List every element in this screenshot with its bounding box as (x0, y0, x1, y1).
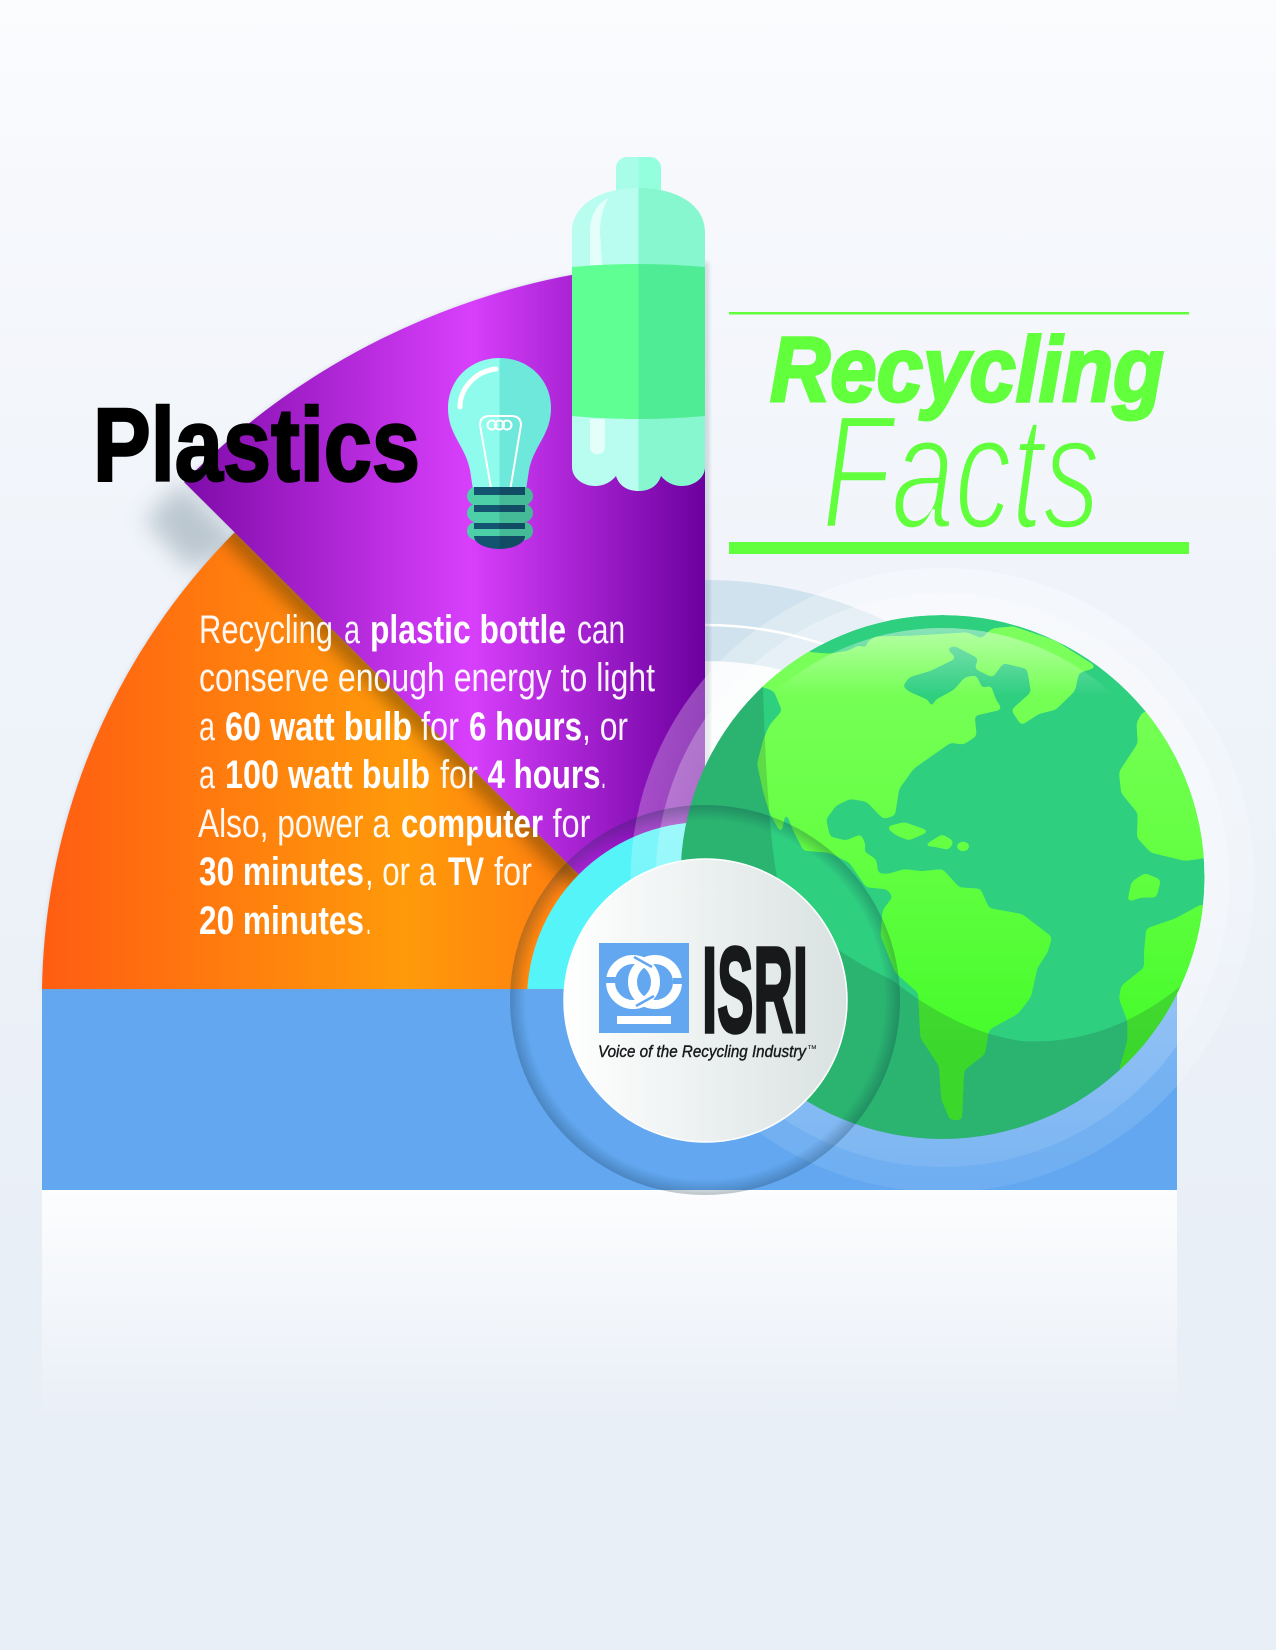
body text (198, 608, 655, 943)
globe lower shadow (681, 686, 1180, 1139)
body text: , or a (365, 850, 437, 894)
continents (758, 626, 1204, 1120)
body text: 100 watt bulb (225, 753, 430, 797)
bulb glass (448, 358, 551, 490)
body text: conserve enough energy to light (199, 656, 655, 700)
orange sector (40, 532, 579, 990)
body text: can (577, 608, 625, 652)
body text: Recycling (199, 608, 333, 652)
body text: . (366, 899, 371, 943)
body text: a (344, 608, 361, 652)
body text: . (601, 753, 606, 797)
body text: 30 minutes (199, 850, 364, 894)
pale concentric sectors behind globe (705, 580, 886, 708)
globe halo rings (630, 568, 1254, 1192)
ISRI logo (598, 922, 817, 1061)
plastic bottle icon (572, 157, 705, 491)
globe top gloss (781, 628, 1106, 689)
purple sector (184, 262, 710, 1000)
bulb filament (480, 416, 521, 488)
title: Recycling Facts: Facts (822, 380, 1100, 563)
logo tagline: Voice of the Recycling Industry (598, 1042, 807, 1061)
body text: , or (582, 705, 628, 749)
logo mark (599, 943, 689, 1033)
trademark: ™ (807, 1044, 817, 1055)
body text: computer (401, 802, 543, 846)
heading: Plastics: Plastics (93, 388, 420, 504)
body text: TV (448, 850, 484, 894)
title: Recycling Facts (729, 312, 1189, 563)
body text: for (440, 753, 478, 797)
body text: Also, power a (198, 802, 391, 846)
lens ring (510, 805, 900, 1195)
body text: 60 watt bulb (225, 705, 412, 749)
bottle label (572, 264, 705, 419)
bulb base (467, 486, 534, 550)
title: Recycling Facts: Recycling (770, 319, 1164, 421)
globe (681, 615, 1204, 1139)
body text: a (199, 753, 216, 797)
body text: a (199, 705, 216, 749)
body text: for (494, 850, 532, 894)
body text: 4 hours (488, 753, 600, 797)
text: ISRI (702, 922, 808, 1058)
body text: for (552, 802, 590, 846)
cyan inner circle (527, 823, 686, 989)
body text: for (421, 705, 459, 749)
body text: 20 minutes (199, 899, 364, 943)
bottle highlights (590, 198, 608, 455)
white fading panel (42, 1190, 1177, 1420)
shadow under wedge tip (145, 482, 245, 570)
white logo disc (564, 859, 847, 1142)
light bulb icon (448, 358, 551, 550)
blue band (42, 989, 1177, 1190)
body text: plastic bottle (370, 608, 566, 652)
body text: 6 hours (469, 705, 582, 749)
